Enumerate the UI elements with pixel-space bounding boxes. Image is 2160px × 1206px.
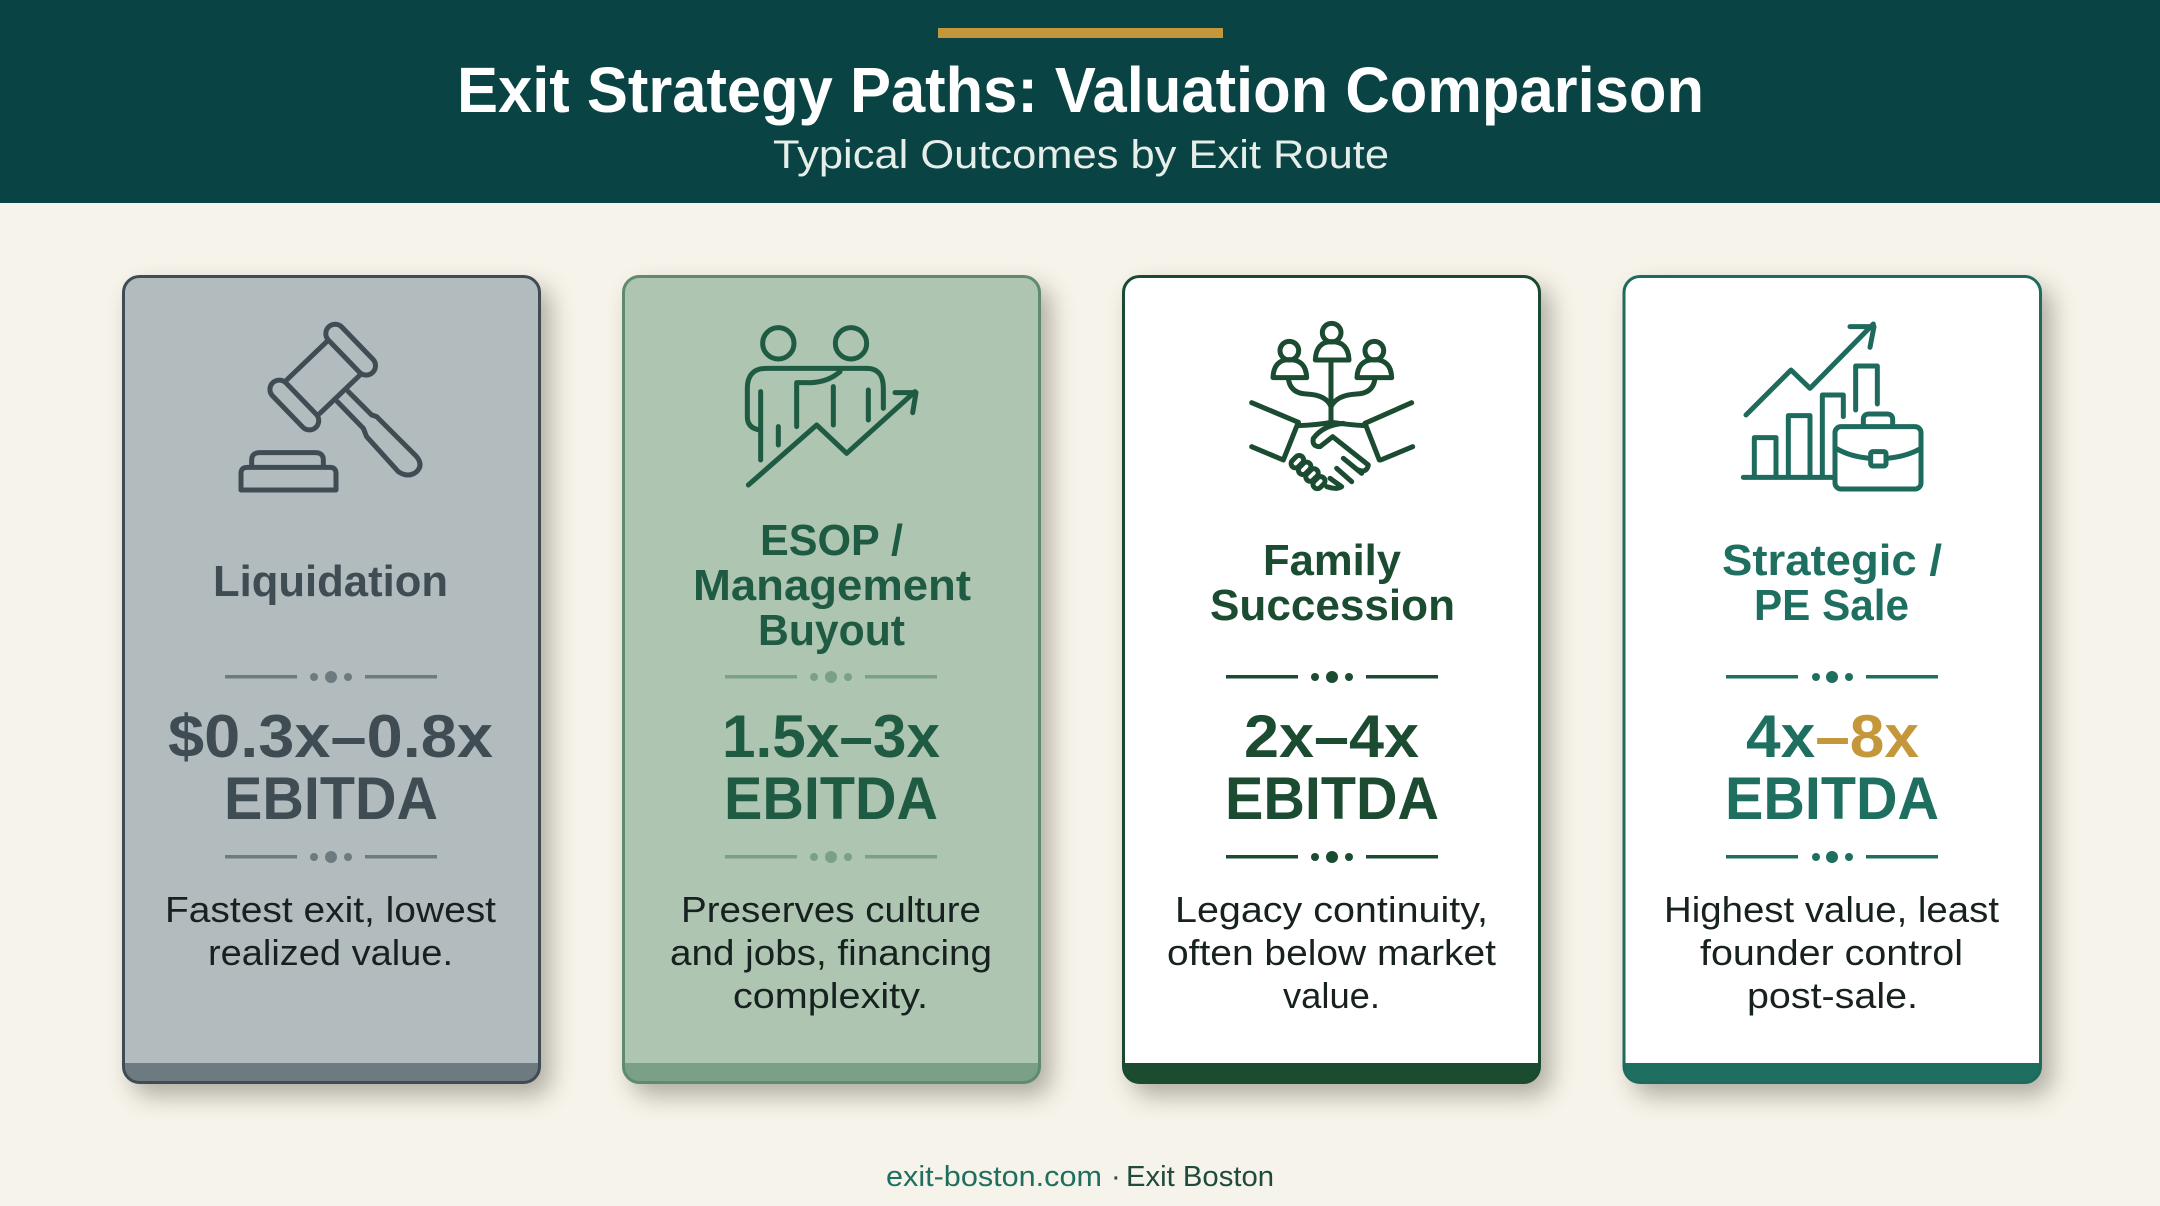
valuation: 2x–4x: [1244, 703, 1419, 770]
subtitle: Typical Outcomes by Exit Route: [773, 133, 1389, 177]
valuation: 1.5x–3x: [722, 703, 940, 770]
heading: ESOP /: [760, 516, 903, 565]
icon: gavel: [241, 320, 420, 490]
description: Preserves culture: [681, 889, 981, 930]
valuation: [168, 703, 493, 832]
valuation: [1225, 703, 1439, 832]
description: complexity.: [733, 975, 928, 1016]
panel: family succession: [1124, 276, 1551, 1096]
footer: ·: [1111, 1161, 1121, 1193]
valuation: 4x–8x: [1746, 703, 1919, 770]
footer: Exit Boston: [1126, 1161, 1274, 1193]
description: [670, 889, 992, 1016]
heading: Liquidation: [213, 557, 448, 606]
divider: [1226, 671, 1438, 683]
heading: [1722, 536, 1942, 630]
description: [165, 889, 496, 973]
heading: [693, 516, 971, 655]
description: Fastest exit, lowest: [165, 889, 496, 930]
heading: Succession: [1210, 581, 1455, 630]
valuation: EBITDA: [724, 765, 938, 832]
valuation: [722, 703, 940, 832]
panel: esop / management buyout: [624, 276, 1051, 1096]
panel: strategic / pe sale: [1624, 276, 2052, 1096]
description: realized value.: [208, 932, 453, 973]
valuation: $0.3x–0.8x: [168, 703, 493, 770]
footer: exit-boston.com: [886, 1161, 1102, 1193]
description: value.: [1283, 975, 1380, 1016]
divider: [1726, 851, 1938, 863]
description: and jobs, financing: [670, 932, 992, 973]
divider: [225, 851, 437, 863]
heading: [1210, 536, 1455, 630]
header band: [0, 0, 2160, 203]
footer: [886, 1161, 1274, 1193]
divider: [225, 671, 437, 683]
valuation: [1725, 703, 1939, 832]
description: [1664, 889, 1999, 1016]
divider: [725, 671, 937, 683]
description: often below market: [1167, 932, 1496, 973]
description: Legacy continuity,: [1175, 889, 1488, 930]
valuation: EBITDA: [224, 765, 438, 832]
valuation: EBITDA: [1225, 765, 1439, 832]
description: Highest value, least: [1664, 889, 1999, 930]
description: [1167, 889, 1496, 1016]
heading: Management: [693, 561, 971, 610]
heading: Family: [1263, 536, 1402, 585]
divider: [1226, 851, 1438, 863]
heading: Strategic /: [1722, 536, 1942, 585]
description: post-sale.: [1747, 975, 1918, 1016]
icon: family tree and handshake: [1252, 323, 1413, 490]
divider: [1726, 671, 1938, 683]
icon: partners with rising arrow: [747, 328, 916, 485]
divider: [725, 851, 937, 863]
valuation: EBITDA: [1725, 765, 1939, 832]
gold accent bar: [938, 28, 1223, 38]
description: founder control: [1700, 932, 1963, 973]
heading: PE Sale: [1754, 581, 1909, 630]
title: Exit Strategy Paths: Valuation Comparison: [457, 54, 1704, 126]
panel: liquidation: [124, 276, 551, 1096]
heading: Buyout: [758, 606, 905, 655]
icon: growth chart and briefcase: [1743, 324, 1921, 489]
